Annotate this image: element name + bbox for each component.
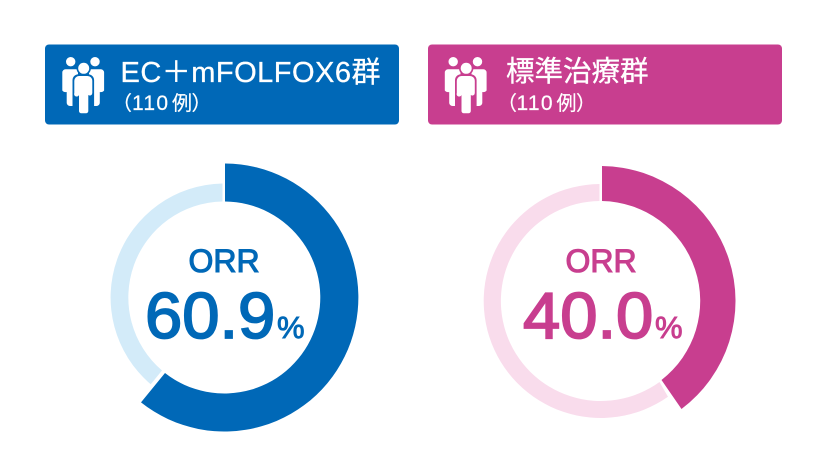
- value arc: [141, 164, 358, 431]
- unit: percent: %: [277, 310, 305, 345]
- label: ORR: ORR: [565, 243, 637, 279]
- heading: EC+mFOLFOX6 group: EC＋mFOLFOX6群: [120, 56, 380, 89]
- text: patient count: （: [112, 92, 132, 115]
- heading: standard treatment group: 標準治療群: [506, 56, 649, 88]
- text: patient count: ）: [192, 92, 212, 115]
- chart: pink donut 40.0%: [484, 166, 736, 418]
- text: patient count: 例: [172, 92, 192, 115]
- label: ORR: ORR: [188, 243, 260, 279]
- text: patient count: （: [497, 92, 517, 115]
- text: patient count: 110: [516, 92, 554, 115]
- panel: EC+mFOLFOX6 group header: [45, 44, 399, 124]
- text: patient count: 例: [556, 92, 576, 115]
- value: 40.0: 40.0: [523, 279, 653, 352]
- light track: [484, 184, 668, 418]
- value: 60.9: 60.9: [145, 279, 275, 352]
- icon: group of people (blue header): [62, 57, 104, 116]
- light track: [111, 184, 222, 384]
- chart: blue donut 60.9%: [111, 164, 358, 431]
- value arc: [602, 166, 736, 409]
- panel: standard treatment group header: [428, 44, 782, 124]
- unit: percent: %: [655, 310, 683, 345]
- icon: group of people (pink header): [445, 57, 487, 116]
- text: patient count: 110: [132, 92, 169, 115]
- text: patient count: ）: [576, 92, 596, 115]
